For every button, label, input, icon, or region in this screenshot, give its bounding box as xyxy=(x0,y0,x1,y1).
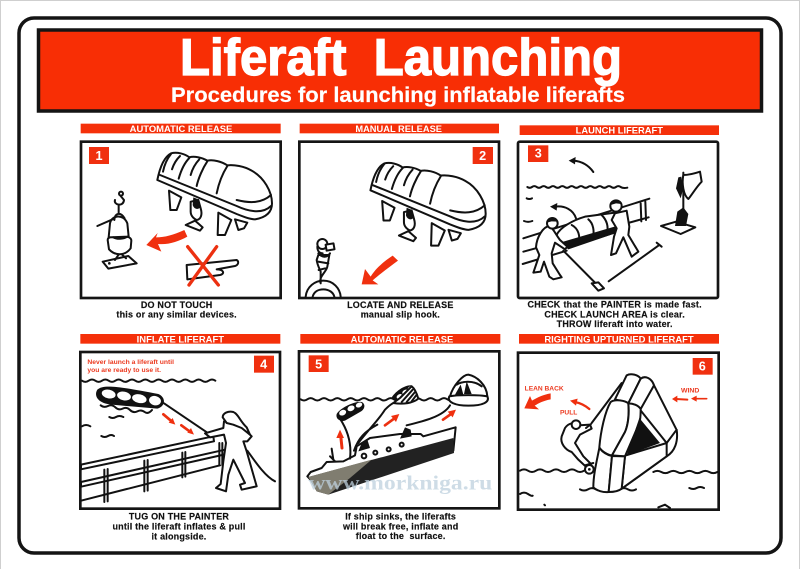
water xyxy=(82,379,215,437)
frame xyxy=(80,352,280,509)
caption: LOCATE AND RELEASE xyxy=(347,300,454,310)
caption: DO NOT TOUCH xyxy=(141,300,212,310)
subtitle: Procedures for launching inflatable liferafts xyxy=(171,84,625,107)
canister raft xyxy=(336,401,364,421)
arrow: pull xyxy=(570,399,589,409)
number 2 xyxy=(473,147,493,164)
panel 6: righting upturned liferaft: RIGHTING UPTURNED LIFERAFT xyxy=(544,334,694,344)
inflating raft xyxy=(391,385,418,404)
icon: crossed-out hand xyxy=(187,247,238,285)
number 4 xyxy=(254,356,274,373)
panel 5: automatic release sinking: float to the surface. xyxy=(356,531,446,541)
panel 5: automatic release sinking: will break free, inflate and xyxy=(342,521,458,531)
arrow: lean back xyxy=(524,393,551,409)
icon: slip hook xyxy=(306,239,341,297)
arrow xyxy=(146,230,187,252)
water xyxy=(524,186,627,222)
number 3 xyxy=(528,145,548,162)
inflated liferaft xyxy=(96,387,164,413)
panel 4: inflate liferaft: it alongside. xyxy=(151,532,207,542)
label: lean back: LEAN BACK xyxy=(525,385,564,392)
railing xyxy=(523,199,649,264)
label: wind: WIND xyxy=(681,387,700,394)
heading xyxy=(80,334,280,344)
caption: CHECK that the PAINTER is made fast. xyxy=(528,300,702,310)
warning text: Never launch a liferaft until xyxy=(87,359,174,366)
caption: If ship sinks, the liferafts xyxy=(345,511,456,521)
number 5: 5 xyxy=(315,357,322,371)
person climbing xyxy=(561,420,594,474)
heading xyxy=(520,125,719,135)
panel 3: launch liferaft: LAUNCH LIFERAFT xyxy=(576,126,664,136)
railing xyxy=(81,436,227,487)
arrows xyxy=(336,410,456,448)
person right xyxy=(610,200,638,257)
warning text: you are ready to use it. xyxy=(87,367,161,374)
frame xyxy=(81,142,281,298)
icon: hydrostatic release device xyxy=(97,192,137,269)
frame xyxy=(299,351,499,508)
water xyxy=(520,469,717,508)
number 2: 2 xyxy=(479,149,486,163)
panel 6: righting upturned liferaft xyxy=(518,334,719,510)
heading xyxy=(81,124,281,133)
frame xyxy=(518,142,718,298)
panel 4: inflate liferaft: INFLATE LIFERAFT xyxy=(137,334,225,344)
upturned raft xyxy=(592,374,677,492)
panel 2: manual release: manual slip hook. xyxy=(361,310,440,320)
banner background xyxy=(38,30,762,111)
painter line xyxy=(563,243,662,291)
floating raft xyxy=(449,375,488,406)
icon: liferaft canister xyxy=(157,153,272,235)
panel 1: automatic release: this or any similar devices. xyxy=(116,310,237,320)
panel 2: manual release: MANUAL RELEASE xyxy=(355,124,442,134)
painter line xyxy=(164,403,208,433)
heading xyxy=(300,124,499,133)
liferaft ascent paths xyxy=(340,403,450,459)
panel 5: automatic release sinking: AUTOMATIC RELEASE xyxy=(351,334,453,344)
liferaft being lifted xyxy=(557,213,617,249)
panel 1: automatic release: AUTOMATIC RELEASE xyxy=(130,124,232,134)
number 1: 1 xyxy=(95,149,103,163)
number 3: 3 xyxy=(535,147,542,161)
panel 4: inflate liferaft xyxy=(80,334,280,542)
panel 5: automatic release sinking xyxy=(299,334,500,541)
frame xyxy=(299,142,499,298)
person pulling xyxy=(205,412,275,491)
deck line xyxy=(81,465,220,501)
title banner xyxy=(38,29,762,111)
arrow xyxy=(362,256,398,284)
caption: TUG ON THE PAINTER xyxy=(129,511,229,521)
panel 3: launch liferaft: THROW liferaft into water. xyxy=(557,319,673,329)
number 4: 4 xyxy=(260,358,267,372)
heading xyxy=(300,334,500,344)
number 6: 6 xyxy=(699,360,706,374)
panel 3: launch liferaft xyxy=(518,125,719,329)
icon: liferaft canister xyxy=(370,163,486,246)
panel 4: inflate liferaft: until the liferaft inflates & pull xyxy=(112,521,246,531)
number 1 xyxy=(89,147,109,164)
arrow: raft throw xyxy=(550,203,576,218)
panel 2: manual release xyxy=(299,124,499,320)
panel 1: automatic release xyxy=(81,124,281,320)
watermark: www.morkniga.ru xyxy=(308,472,492,494)
railing posts xyxy=(104,443,222,502)
panel 3: launch liferaft: CHECK LAUNCH AREA is clear. xyxy=(544,309,685,319)
arrow: top xyxy=(569,157,593,172)
label: pull: PULL xyxy=(560,410,577,417)
frame xyxy=(518,353,719,510)
arrows xyxy=(163,414,194,435)
sea surface xyxy=(301,398,487,400)
person left xyxy=(533,218,567,279)
ship xyxy=(307,427,456,495)
heading xyxy=(519,334,719,344)
arrows: wind xyxy=(672,396,707,402)
number 6 xyxy=(693,358,713,375)
icon: painter attachment xyxy=(661,172,702,234)
warning text xyxy=(87,359,174,374)
number 5 xyxy=(309,355,329,372)
title: Liferaft Launching xyxy=(180,29,622,87)
